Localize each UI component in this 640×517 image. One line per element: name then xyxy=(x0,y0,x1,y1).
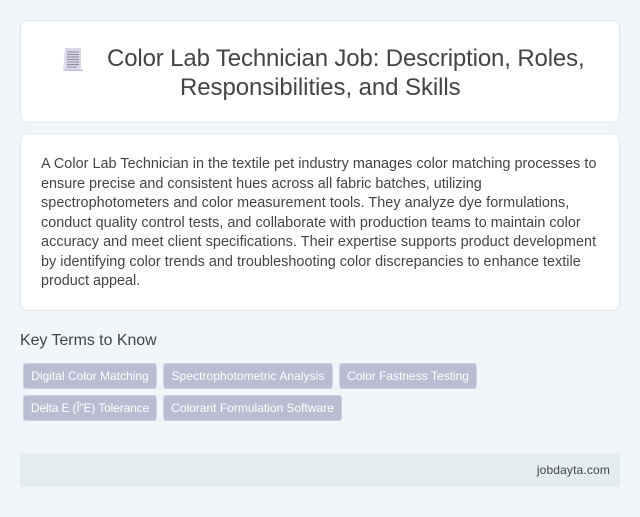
tag xyxy=(163,363,333,389)
description text xyxy=(41,156,596,289)
panel: title card xyxy=(20,20,620,123)
footer bar xyxy=(20,453,620,487)
description text: by identifying color trends and troubleshooting color discrepancies to enhance textile xyxy=(41,254,581,270)
description text: accuracy and meet client specifications. Their expertise supports product development xyxy=(41,234,596,250)
footer source text: jobdayta.com xyxy=(537,463,610,477)
title: Color Lab Technician Job: Description, Roles, xyxy=(107,45,585,72)
tag: Digital Color Matching xyxy=(31,369,149,383)
tag group: key terms xyxy=(23,363,477,421)
title: Responsibilities, and Skills xyxy=(180,74,461,101)
tag xyxy=(339,363,477,389)
tag: Delta E (Î”E) Tolerance xyxy=(31,401,149,415)
description text: A Color Lab Technician in the textile pet industry manages color matching processes to xyxy=(41,156,596,172)
description text: conduct quality control tests, and collaborate with production teams to maintain color xyxy=(41,215,581,231)
tag: Colorant Formulation Software xyxy=(171,401,334,415)
description text: spectrophotometers and color measurement tools. They analyze dye formulations, xyxy=(41,195,569,211)
tag: Color Fastness Testing xyxy=(347,369,469,383)
title xyxy=(107,45,585,101)
description text: product appeal. xyxy=(41,273,140,289)
tag: Spectrophotometric Analysis xyxy=(171,369,325,383)
icon: document scroll xyxy=(63,48,83,71)
tag xyxy=(23,363,157,389)
tag xyxy=(23,395,157,421)
heading: key terms: Key Terms to Know xyxy=(20,332,157,349)
description text: ensure precise and consistent hues across all fabric batches, utilizing xyxy=(41,176,482,192)
tag xyxy=(163,395,342,421)
panel: description card xyxy=(20,133,620,311)
